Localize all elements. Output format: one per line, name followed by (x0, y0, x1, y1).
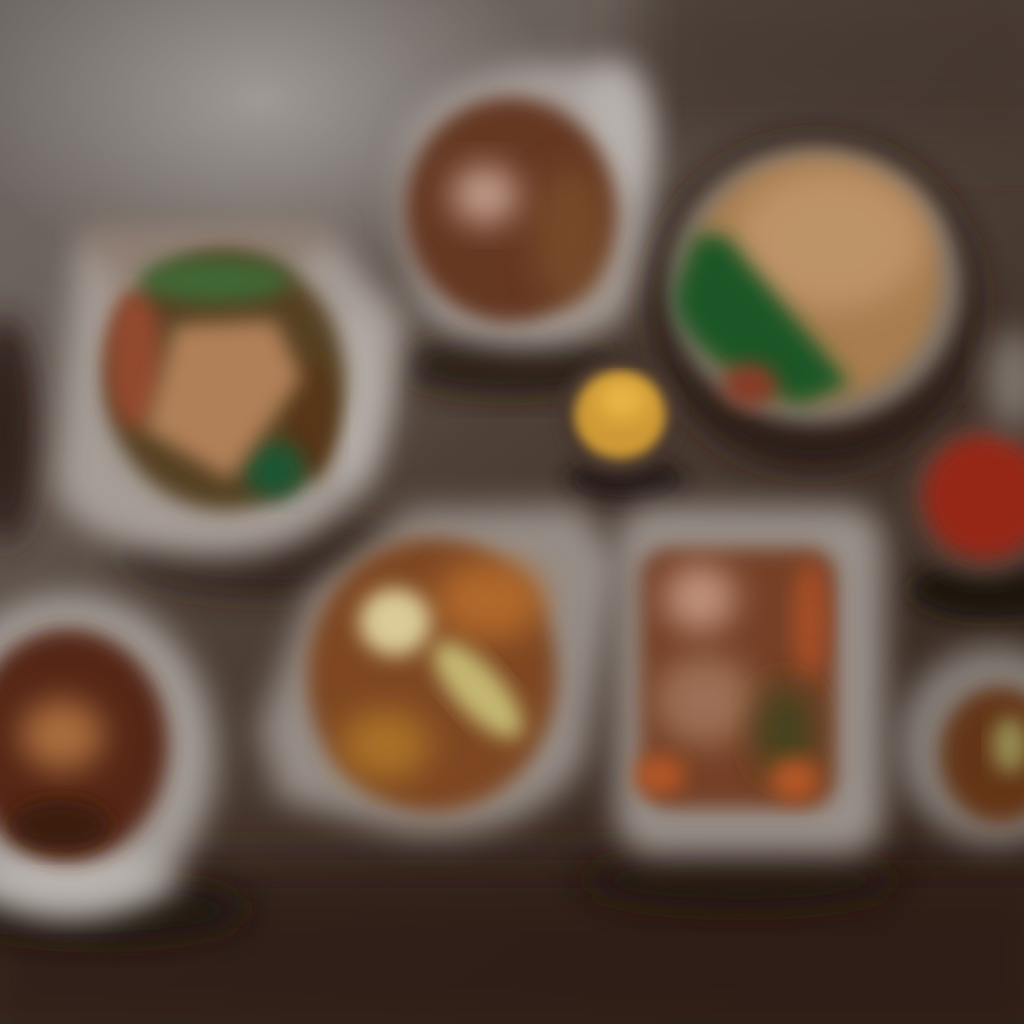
dish: small yellow sauce bowl (560, 355, 685, 504)
dish: bottom left bowl (0, 593, 250, 942)
dish: rectangular tray (580, 505, 900, 910)
dish: bottom right bowl (897, 645, 1024, 845)
dish: top right pan with greens and grain (650, 140, 980, 470)
dish: right red sauce bowl (907, 330, 1024, 620)
salmon fillet (145, 320, 302, 480)
dish: bottom center plate with curry (258, 505, 620, 834)
greens (675, 235, 850, 405)
dish: left plate with salmon and salad (55, 225, 420, 595)
dish: top center brown bowl (395, 60, 652, 395)
